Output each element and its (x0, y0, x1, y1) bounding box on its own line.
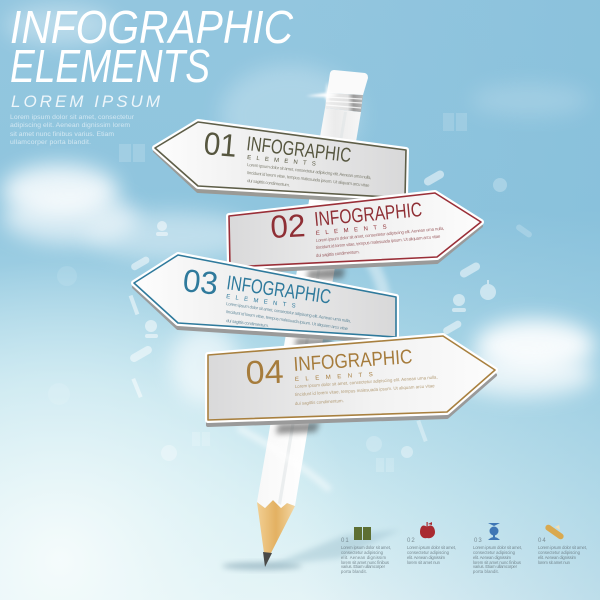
sign 2 (229, 193, 481, 272)
sign 1 body text: Lorem ipsum dolor sit amet, consectetur adipiscing elit. Aenean urna nulla, (247, 162, 372, 180)
title: INFOGRAPHIC (10, 1, 294, 53)
sign 2 body text: tincidunt id lorem vitae, tempus malesuada ipsum. Ut aliquam arcu vitae (316, 234, 441, 250)
legend text 4: elit. Aenean dignissim (538, 555, 576, 560)
sparkle (306, 82, 338, 104)
sign 3 (134, 255, 396, 342)
title: ELEMENTS (10, 40, 210, 92)
sign 2 number: 02 (269, 207, 306, 245)
sign 2 subheading: ELEMENTS (316, 224, 387, 237)
legend item 1 (341, 527, 391, 574)
sign 3 number: 03 (181, 262, 220, 302)
clouds (2, 5, 595, 405)
title (10, 1, 294, 111)
legend text 3: varius. Etiam ullamcorper (473, 564, 518, 569)
icon: faint graduates (145, 178, 507, 458)
sign 2 body text: dui sagittis condimentum. (316, 249, 360, 258)
legend text 2: lorem sit amet nun (407, 560, 441, 565)
legend text 1: Lorem ipsum dolor sit amet, (341, 545, 391, 550)
legend text 3: porta blandit. (473, 569, 499, 574)
pencil shadow on ground (222, 530, 400, 570)
pencil metal band (325, 93, 363, 112)
intro text block: ullamcorper porta blandit. (10, 139, 91, 146)
sign 1 plate (155, 122, 406, 203)
sign 4 plate (208, 336, 495, 425)
icon: diploma (544, 524, 565, 540)
legend text 1: consectetur adipiscing (341, 550, 384, 555)
title: LOREM IPSUM (11, 92, 161, 111)
legend text 4: consectetur adipiscing (538, 550, 581, 555)
sign 4 (208, 336, 495, 425)
sign 3 body text: tincidunt id lorem vitae, tempus malesuada ipsum. Ut aliquam arcu vitae (226, 309, 349, 331)
sign 1 body text: tincidunt id lorem vitae, tempus malesuada ipsum. Ut aliquam arcu vitae (247, 170, 370, 188)
sign 4 number: 04 (245, 353, 284, 391)
sign 3 body text: Lorem ipsum dolor sit amet, consectetur adipiscing elit. Aenean urna nulla, (226, 301, 351, 324)
sign 2 body text (316, 226, 445, 258)
legend text 1: lorem sit amet nunc finibus (341, 560, 389, 565)
pencil body (257, 108, 361, 508)
legend number 03: 03 (474, 538, 483, 544)
sign 4 body text: tincidunt id lorem vitae, tempus malesuada ipsum. Ut aliquam arcu vitae (295, 383, 435, 397)
intro text block: adipiscing elit. Aenean dignissim lorem (10, 122, 130, 129)
legend text 2: elit. Aenean dignissim (407, 555, 446, 560)
icon: faint diplomas (129, 169, 482, 363)
legend text 1: varius. Etiam ullamcorper (341, 564, 386, 569)
icon: faint pencils (129, 223, 533, 442)
sign 1 body text (247, 162, 372, 188)
pencil eraser (327, 70, 368, 95)
pencil wood tip (257, 500, 295, 553)
sign 4 heading: INFOGRAPHIC (293, 346, 413, 376)
sign 1 (155, 122, 406, 203)
sign 3 heading: INFOGRAPHIC (225, 272, 332, 309)
intro text block: Lorem ipsum dolor sit amet, consectetur (10, 114, 135, 121)
legend text 4: lorem sit amet nun (538, 560, 571, 565)
icon: book (354, 527, 371, 540)
legend item 3 (473, 523, 522, 574)
legend text 3: elit. Aenean dignissim (473, 555, 512, 560)
legend text 1: porta blandit. (341, 569, 367, 574)
sign 4 body text: dui sagittis condimentum. (295, 398, 344, 406)
sign 4 body text (295, 375, 438, 406)
pencil shadows under signs (276, 268, 345, 434)
sign 1 body text: dui sagittis condimentum. (247, 178, 290, 187)
legend text 3: lorem sit amet nunc finibus (473, 560, 521, 565)
pencil (257, 70, 368, 567)
faint background icons (48, 113, 533, 472)
sign 4 body text: Lorem ipsum dolor sit amet, consectetur adipiscing elit. Aenean urna nulla, (295, 375, 438, 389)
swoosh light over pencil (238, 428, 330, 490)
sign 3 plate (134, 255, 396, 342)
legend text 1 (341, 545, 391, 574)
legend text 4: Lorem ipsum dolor sit amet, (538, 545, 587, 550)
sign 1 subheading: ELEMENTS (247, 155, 316, 168)
legend text 3 (473, 545, 522, 574)
legend text 1: elit. Aenean dignissim (341, 555, 386, 560)
intro text block (10, 114, 135, 146)
sign 2 heading: INFOGRAPHIC (313, 199, 423, 231)
legend number 01: 01 (341, 538, 350, 544)
intro text block: sit amet nunc finibus varius. Etiam (10, 131, 114, 138)
icon: apple (420, 522, 435, 538)
sign 2 plate (229, 193, 481, 272)
icon: graduate (488, 523, 500, 540)
legend text 4 (538, 545, 587, 565)
legend text 2 (407, 545, 456, 565)
legend item 2 (407, 522, 456, 565)
legend number 04: 04 (538, 538, 547, 544)
sign 3 subheading: ELEMENTS (226, 294, 296, 310)
sign 1 heading: INFOGRAPHIC (245, 133, 352, 167)
sign 2 body text: Lorem ipsum dolor sit amet, consectetur adipiscing elit. Aenean urna nulla, (316, 226, 445, 243)
icon: faint apples (48, 266, 496, 461)
sign 4 subheading: ELEMENTS (295, 372, 373, 383)
legend text 2: consectetur adipiscing (407, 550, 450, 555)
legend text 2: Lorem ipsum dolor sit amet, (407, 545, 456, 550)
legend number 02: 02 (407, 538, 416, 544)
legend item 4 (538, 524, 587, 565)
legend text 3: Lorem ipsum dolor sit amet, (473, 545, 522, 550)
sign 1 number: 01 (202, 125, 238, 164)
sign 3 body text: dui sagittis condimentum. (226, 318, 269, 328)
pencil lead (263, 552, 272, 567)
icon: faint books (119, 113, 467, 472)
legend text 3: consectetur adipiscing (473, 550, 516, 555)
